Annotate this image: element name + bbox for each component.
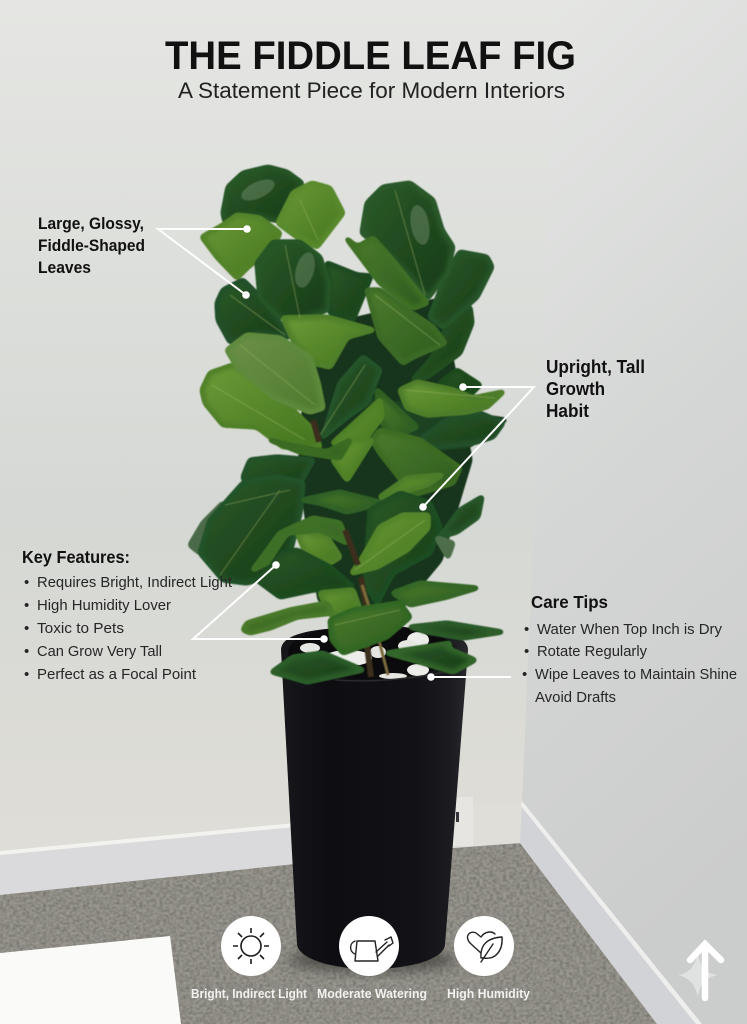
care tips list: •	[524, 643, 529, 660]
callout: growth habit	[419, 357, 645, 511]
callout text: growth	[546, 357, 645, 421]
label: humidity: High Humidity	[447, 987, 530, 1001]
callout lines: key features	[193, 561, 328, 643]
key features list: •	[24, 574, 29, 591]
key features heading: Key Features:	[22, 547, 130, 567]
care tips list: Wipe Leaves to Maintain Shine	[535, 666, 737, 683]
care tips list: Water When Top Inch is Dry	[537, 621, 722, 638]
foliage	[190, 167, 505, 682]
callout text: leaves: Large, Glossy,	[38, 215, 144, 233]
icon: logo arrow	[678, 944, 721, 998]
key features list: •	[24, 620, 29, 637]
callout text: growth: Upright, Tall	[546, 357, 645, 377]
callout line: care tips	[427, 673, 511, 681]
callout text: growth: Habit	[546, 401, 589, 421]
callout: large leaves	[38, 215, 251, 299]
title: THE FIDDLE LEAF FIG	[165, 34, 576, 78]
callout text: leaves: Leaves	[38, 259, 91, 277]
label: light: Bright, Indirect Light	[191, 987, 308, 1001]
care tips list	[522, 621, 737, 706]
subtitle: A Statement Piece for Modern Interiors	[178, 78, 565, 103]
key features list: Requires Bright, Indirect Light	[37, 574, 233, 591]
care tips list: •	[524, 621, 529, 638]
key features list: •	[24, 597, 29, 614]
care tips list: Avoid Drafts	[535, 689, 616, 706]
key features list: Can Grow Very Tall	[37, 643, 162, 660]
woody stem	[313, 420, 371, 677]
key features list: Perfect as a Focal Point	[37, 666, 197, 683]
icon: heart and leaf	[454, 916, 514, 976]
panel: key features	[22, 547, 328, 683]
key features list	[24, 574, 233, 683]
icon: sun	[221, 916, 281, 976]
black planter pot	[281, 625, 468, 969]
callout text: leaves	[38, 215, 145, 277]
panel: care tips	[427, 592, 737, 706]
care tips list: •	[522, 666, 527, 683]
care tips list: Rotate Regularly	[537, 643, 647, 660]
plant with pot	[190, 167, 505, 972]
callout lines: growth	[419, 383, 534, 511]
callout lines: leaves	[158, 225, 251, 299]
care tips heading: Care Tips	[531, 592, 608, 612]
key features list: •	[24, 643, 29, 660]
callout text: leaves: Fiddle-Shaped	[38, 237, 145, 255]
label: watering: Moderate Watering	[317, 987, 427, 1001]
icon: watering can	[339, 916, 399, 976]
key features list: Toxic to Pets	[37, 620, 124, 637]
leaf veins and gloss	[212, 190, 495, 625]
pot shadow	[288, 948, 456, 972]
callout text: growth: Growth	[546, 379, 605, 399]
key features list: •	[24, 666, 29, 683]
key features list: High Humidity Lover	[37, 597, 171, 614]
